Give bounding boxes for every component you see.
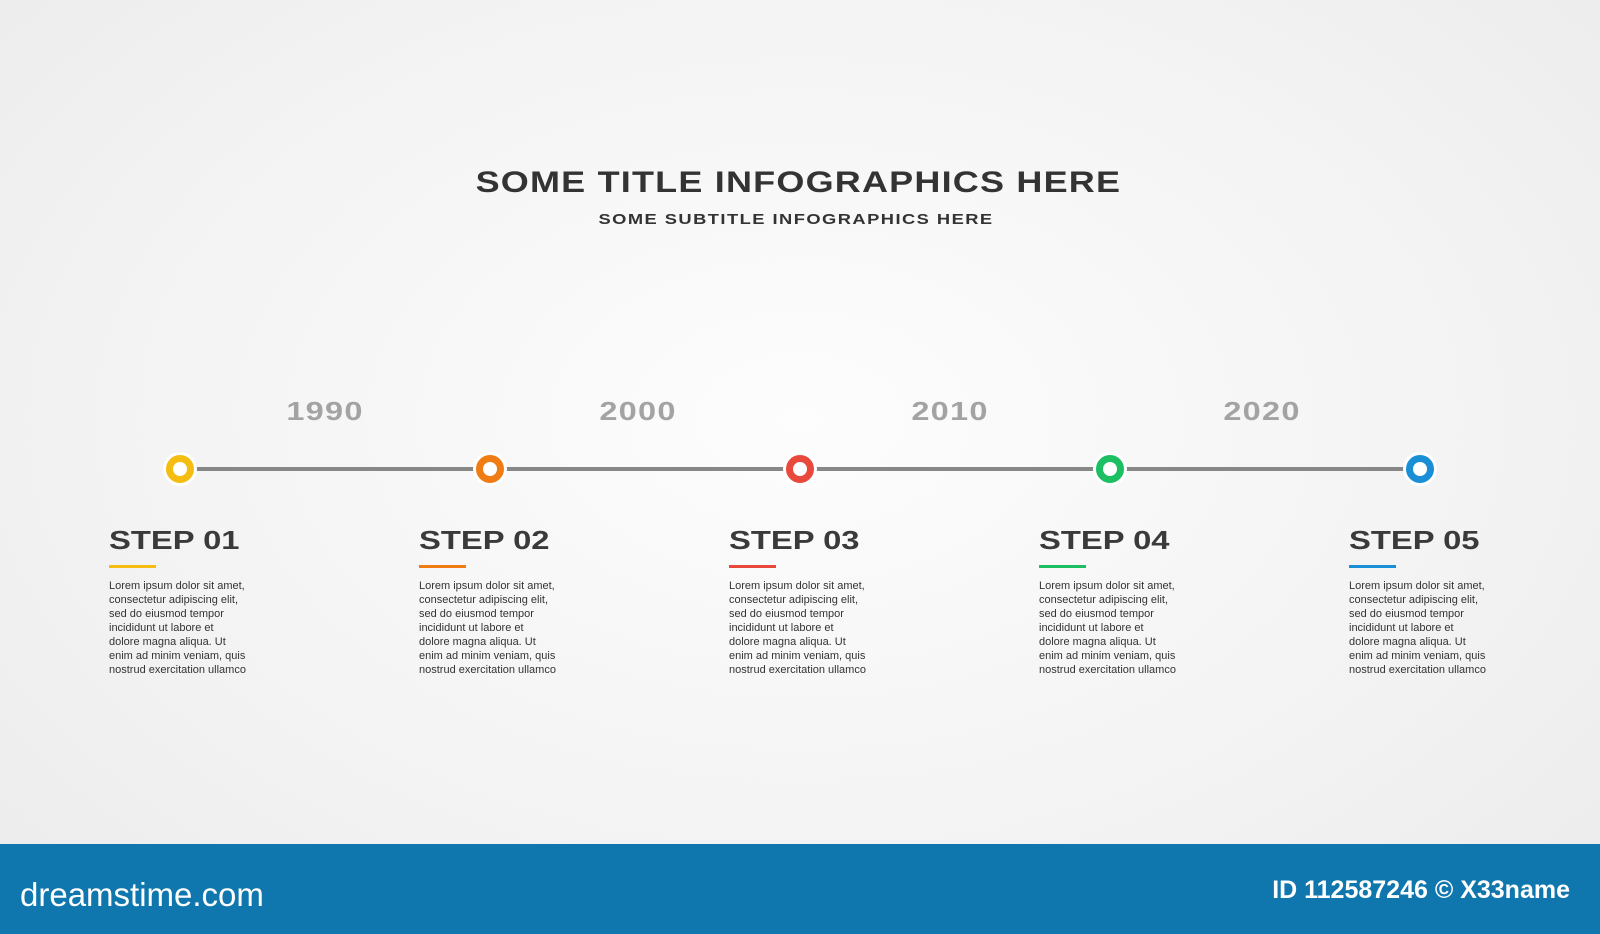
marker 3 <box>786 455 814 483</box>
footer logo: dreamstime.com <box>20 876 264 913</box>
step 03: incididunt ut labore et <box>729 622 834 634</box>
step 01: nostrud exercitation ullamco <box>109 664 246 676</box>
footer id: ID 112587246 © X33name <box>1272 876 1570 904</box>
step 02: consectetur adipiscing elit, <box>419 594 548 606</box>
year: 2000: 2000 <box>599 396 677 426</box>
step 02: incididunt ut labore et <box>419 622 524 634</box>
title: SOME TITLE INFOGRAPHICS HERE <box>476 166 1121 199</box>
step 05: sed do eiusmod tempor <box>1349 608 1464 620</box>
step 01: sed do eiusmod tempor <box>109 608 224 620</box>
step 05: Lorem ipsum dolor sit amet, <box>1349 580 1485 592</box>
step 05: enim ad minim veniam, quis <box>1349 650 1485 662</box>
step 04: STEP 04 <box>1039 525 1170 555</box>
step 01: Lorem ipsum dolor sit amet, <box>109 580 245 592</box>
step 02 <box>419 525 556 676</box>
step 02: nostrud exercitation ullamco <box>419 664 556 676</box>
step 05: STEP 05 <box>1349 525 1480 555</box>
step 03: sed do eiusmod tempor <box>729 608 844 620</box>
step 04: incididunt ut labore et <box>1039 622 1144 634</box>
step 03: enim ad minim veniam, quis <box>729 650 865 662</box>
step 04: enim ad minim veniam, quis <box>1039 650 1175 662</box>
subtitle: SOME SUBTITLE INFOGRAPHICS HERE <box>598 211 994 228</box>
marker 4 <box>1096 455 1124 483</box>
step 01: STEP 01 <box>109 525 240 555</box>
step 02: Lorem ipsum dolor sit amet, <box>419 580 555 592</box>
step 01: consectetur adipiscing elit, <box>109 594 238 606</box>
step 05 <box>1349 525 1486 676</box>
step 03: dolore magna aliqua. Ut <box>729 636 846 648</box>
step 02: enim ad minim veniam, quis <box>419 650 555 662</box>
year: 1990: 1990 <box>286 396 364 426</box>
step 04: consectetur adipiscing elit, <box>1039 594 1168 606</box>
step 04: Lorem ipsum dolor sit amet, <box>1039 580 1175 592</box>
step 04: sed do eiusmod tempor <box>1039 608 1154 620</box>
step 01 <box>109 525 246 676</box>
step 02: dolore magna aliqua. Ut <box>419 636 536 648</box>
step 05: consectetur adipiscing elit, <box>1349 594 1478 606</box>
step 05: incididunt ut labore et <box>1349 622 1454 634</box>
step 04: dolore magna aliqua. Ut <box>1039 636 1156 648</box>
step 03: Lorem ipsum dolor sit amet, <box>729 580 865 592</box>
step 03 <box>729 525 866 676</box>
step 02: STEP 02 <box>419 525 550 555</box>
step 04 <box>1039 525 1176 676</box>
year: 2010: 2010 <box>911 396 989 426</box>
year: 2020: 2020 <box>1223 396 1301 426</box>
step 01: incididunt ut labore et <box>109 622 214 634</box>
step 01: dolore magna aliqua. Ut <box>109 636 226 648</box>
footer bar <box>0 844 1600 934</box>
step 04: nostrud exercitation ullamco <box>1039 664 1176 676</box>
marker 2 <box>476 455 504 483</box>
marker 5 <box>1406 455 1434 483</box>
step 03: consectetur adipiscing elit, <box>729 594 858 606</box>
step 05: dolore magna aliqua. Ut <box>1349 636 1466 648</box>
step 03: STEP 03 <box>729 525 860 555</box>
step 05: nostrud exercitation ullamco <box>1349 664 1486 676</box>
step 03: nostrud exercitation ullamco <box>729 664 866 676</box>
step 02: sed do eiusmod tempor <box>419 608 534 620</box>
step 01: enim ad minim veniam, quis <box>109 650 245 662</box>
timeline line <box>180 467 1420 471</box>
marker 1 <box>166 455 194 483</box>
